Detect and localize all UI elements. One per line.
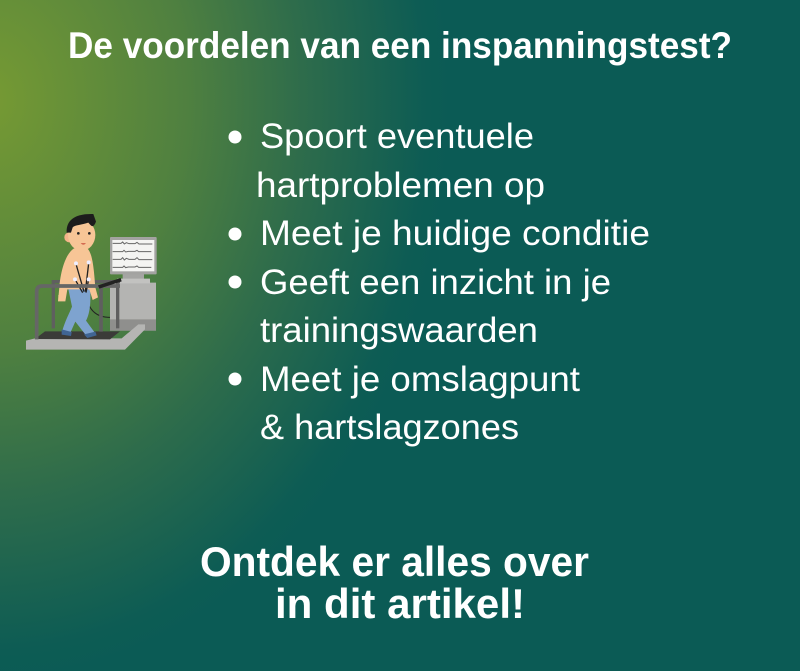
bullet: omslagpunt: Meet je omslagpunt bbox=[260, 360, 580, 399]
benefits list bbox=[228, 117, 650, 447]
call to action line 2: in dit artikel! bbox=[275, 580, 525, 627]
bullet: conditie: Meet je huidige conditie bbox=[260, 214, 650, 253]
bullet: hartproblemen: Spoort eventuele bbox=[260, 117, 534, 156]
bullet: omslagpunt: & hartslagzones bbox=[260, 408, 519, 447]
monitor bbox=[110, 237, 157, 274]
machine cabinet bbox=[110, 283, 156, 331]
torso bbox=[58, 248, 98, 301]
treadmill base bbox=[26, 324, 145, 350]
head bbox=[64, 232, 74, 242]
treadmill front rail bbox=[37, 286, 120, 339]
title: De voordelen van een inspanningstest? bbox=[68, 25, 732, 66]
treadmill rear rail bbox=[53, 282, 120, 328]
cables and electrodes bbox=[75, 263, 89, 293]
bullet: trainingswaarden: trainingswaarden bbox=[260, 311, 538, 350]
icon: man on treadmill with ECG monitor bbox=[26, 214, 157, 350]
call to action line 1: Ontdek er alles over bbox=[200, 538, 589, 585]
bullet: hartproblemen: hartproblemen op bbox=[256, 166, 545, 205]
bullet: hartproblemen bbox=[228, 117, 545, 205]
bullet: omslagpunt bbox=[228, 360, 580, 447]
legs bbox=[62, 287, 95, 335]
bullet: trainingswaarden: Geeft een inzicht in je bbox=[260, 263, 611, 302]
arm hands bbox=[58, 295, 65, 301]
cable to machine bbox=[86, 293, 110, 317]
call to action bbox=[200, 538, 589, 627]
bullet: trainingswaarden bbox=[228, 263, 611, 350]
